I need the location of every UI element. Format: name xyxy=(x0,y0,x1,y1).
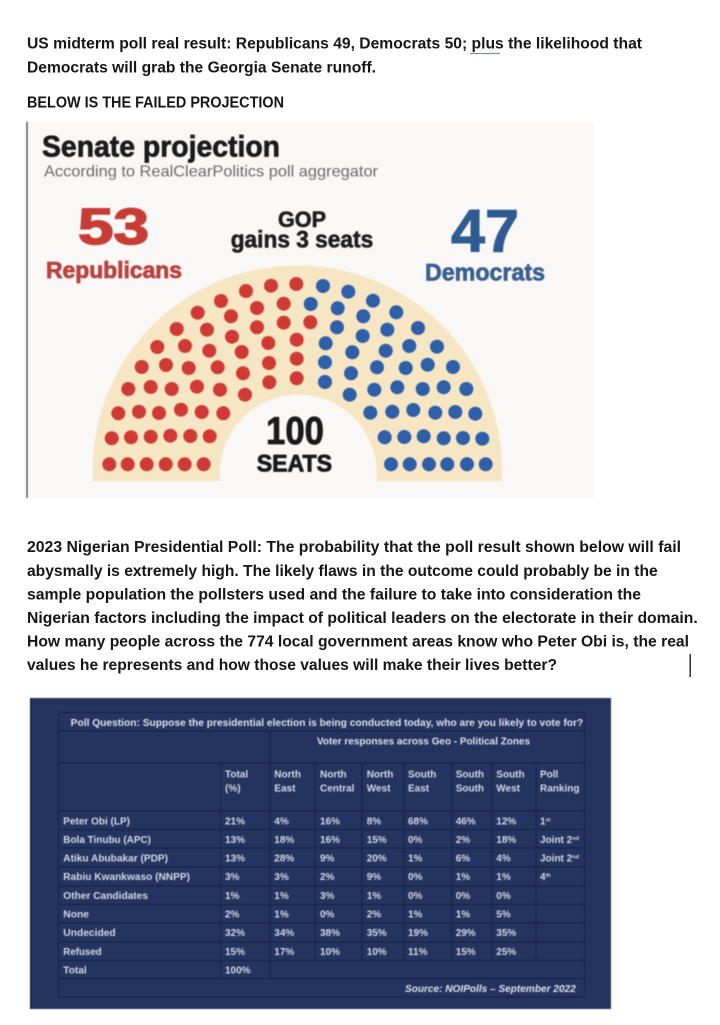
hemicycle arch xyxy=(93,265,502,481)
row: Bola Tinubu: nd xyxy=(572,836,579,842)
row: Bola Tinubu xyxy=(63,835,579,846)
row: Rabiu Kwankwaso xyxy=(63,872,551,883)
zones heading: Voter responses across Geo - Political Zones xyxy=(317,736,530,747)
row: Other Candidates: Other Candidates xyxy=(63,891,148,902)
row: Rabiu Kwankwaso: 4 xyxy=(540,872,546,883)
row: Rabiu Kwankwaso: 2% xyxy=(320,872,335,883)
total seats label: SEATS xyxy=(257,451,332,478)
row: Refused: 15% xyxy=(225,947,245,958)
row: Atiku Abubakar xyxy=(63,854,579,865)
row: Other Candidates: 0% xyxy=(408,891,423,902)
row: Bola Tinubu: 18% xyxy=(274,835,294,846)
row: Undecided: 35% xyxy=(367,928,387,939)
column headers: (%) xyxy=(225,784,241,795)
column headers: East xyxy=(408,784,430,795)
row: Atiku Abubakar: 6% xyxy=(456,854,470,865)
column headers: Central xyxy=(320,784,355,795)
row: Rabiu Kwankwaso: 3% xyxy=(225,872,240,883)
row: Refused: 25% xyxy=(496,947,516,958)
row: Bola Tinubu: 18% xyxy=(496,835,516,846)
subheading: failed projection: BELOW IS THE FAILED PROJECTION xyxy=(27,95,284,112)
row: None: 1% xyxy=(274,910,289,921)
table grid xyxy=(58,712,585,997)
column headers: South xyxy=(456,770,484,781)
panel: senate projection xyxy=(26,122,594,498)
column headers: North xyxy=(320,770,347,781)
democrat label: Democrats xyxy=(425,260,545,287)
intro text: US midterm result xyxy=(27,36,642,77)
source note: Source: NOIPolls – September 2022 xyxy=(405,984,576,995)
row: Peter Obi: 16% xyxy=(320,816,340,827)
row: None xyxy=(63,910,511,921)
column headers: North xyxy=(274,770,301,781)
GOP gains note: GOP xyxy=(278,207,326,232)
row: Undecided: 38% xyxy=(320,928,340,939)
row: Peter Obi: 4% xyxy=(274,816,289,827)
row: Total: Total xyxy=(63,966,87,976)
democrat count: 47 xyxy=(451,198,519,265)
row: Rabiu Kwankwaso: Rabiu Kwankwaso (NNPP) xyxy=(63,872,190,883)
row: Other Candidates: 0% xyxy=(496,891,511,902)
row: Peter Obi: 21% xyxy=(225,816,245,827)
row: Peter Obi: 1 xyxy=(540,816,546,827)
row: Other Candidates: 1% xyxy=(367,891,381,902)
column headers: South xyxy=(456,784,484,795)
red seats xyxy=(102,277,317,471)
column headers: South xyxy=(496,770,525,781)
row: Refused: 15% xyxy=(456,947,476,958)
row: Bola Tinubu: 13% xyxy=(225,835,245,846)
row: Other Candidates xyxy=(63,891,511,902)
row: Rabiu Kwankwaso: 0% xyxy=(408,872,423,883)
row: Rabiu Kwankwaso: 1% xyxy=(496,872,511,883)
row: Atiku Abubakar: 28% xyxy=(274,854,294,865)
intro text: US midterm result: US midterm poll real result: Republicans 49, Democrats 50; plus the likelihood that xyxy=(27,36,642,52)
row: Atiku Abubakar: Joint 2 xyxy=(540,854,572,865)
column headers xyxy=(225,770,579,795)
row: Refused xyxy=(63,947,516,958)
paragraph: Nigerian presidential poll: How many people across the 774 local government areas know who Peter Obi is, the real xyxy=(27,634,689,651)
total seats label: 100 xyxy=(266,410,324,453)
row: Other Candidates: 1% xyxy=(225,891,240,902)
row: Peter Obi: 12% xyxy=(496,816,516,827)
row: Atiku Abubakar: Atiku Abubakar (PDP) xyxy=(63,854,168,865)
row: Undecided: 32% xyxy=(225,928,245,939)
GOP gains note: gains 3 seats xyxy=(231,226,373,253)
row: Refused: 10% xyxy=(367,947,387,958)
paragraph: Nigerian presidential poll: 2023 Nigerian Presidential Poll: The probability that the poll result shown below will fail xyxy=(27,539,681,556)
column headers: South xyxy=(408,770,436,781)
paragraph: Nigerian presidential poll: Nigerian factors including the impact of political leaders on the electorate in their domain. xyxy=(27,610,698,627)
row: Undecided xyxy=(63,928,516,939)
row: Rabiu Kwankwaso: th xyxy=(546,873,551,879)
row: Rabiu Kwankwaso: 3% xyxy=(274,872,289,883)
column headers: Ranking xyxy=(540,784,579,795)
row: Bola Tinubu: Joint 2 xyxy=(540,835,572,846)
row: Total xyxy=(63,966,251,976)
row: Bola Tinubu: 0% xyxy=(408,835,423,846)
row: Refused: 11% xyxy=(408,947,428,958)
row: Refused: Refused xyxy=(63,947,102,958)
paragraph: Nigerian presidential poll xyxy=(27,539,698,674)
row: None: 2% xyxy=(225,910,240,921)
poll question: Poll Question: Suppose the presidential election is being conducted today, who are you likely to vote for? xyxy=(71,718,583,729)
row: Bola Tinubu: Bola Tinubu (APC) xyxy=(63,835,151,846)
row: Peter Obi: st xyxy=(546,817,551,823)
row: Other Candidates: 1% xyxy=(274,891,289,902)
row: Undecided: 35% xyxy=(496,928,516,939)
republican label: Republicans xyxy=(46,257,182,283)
row: Other Candidates: 3% xyxy=(320,891,335,902)
row: None: 5% xyxy=(496,910,511,921)
row: Undecided: 19% xyxy=(408,928,428,939)
row: Total: 100% xyxy=(225,966,251,976)
senate subtitle: According to RealClearPolitics poll aggregator xyxy=(44,164,379,181)
row: Rabiu Kwankwaso: 1% xyxy=(456,872,470,883)
GOP gains note xyxy=(231,207,373,253)
paragraph: Nigerian presidential poll: values he represents and how those values will make their lives better? xyxy=(27,657,557,674)
row: None: 2% xyxy=(367,910,381,921)
column headers: North xyxy=(367,770,393,781)
republican count: 53 xyxy=(78,198,149,255)
row: Undecided: Undecided xyxy=(63,928,116,939)
row: Other Candidates: 0% xyxy=(456,891,470,902)
blue seats xyxy=(304,279,493,471)
row: None: 1% xyxy=(408,910,423,921)
row: Bola Tinubu: 2% xyxy=(456,835,470,846)
row: Rabiu Kwankwaso: 9% xyxy=(367,872,381,883)
row: Bola Tinubu: 15% xyxy=(367,835,387,846)
row: Undecided: 34% xyxy=(274,928,294,939)
senate title: Senate projection xyxy=(42,131,280,164)
paragraph: Nigerian presidential poll: abysmally is extremely high. The likely flaws in the outcome could probably be in the xyxy=(27,563,658,580)
row: Peter Obi: Peter Obi (LP) xyxy=(63,816,130,827)
column headers: Total xyxy=(225,770,248,781)
text cursor mark xyxy=(690,654,691,677)
row: Atiku Abubakar: nd xyxy=(572,855,579,861)
row: Peter Obi xyxy=(63,816,551,827)
row: Bola Tinubu: 16% xyxy=(320,835,340,846)
paragraph: Nigerian presidential poll: sample population the pollsters used and the failure to take into consideration the xyxy=(27,586,641,604)
row: Atiku Abubakar: 20% xyxy=(367,854,387,865)
column headers: West xyxy=(367,784,391,795)
column headers: East xyxy=(274,784,296,795)
row: Atiku Abubakar: 4% xyxy=(496,854,511,865)
row: Peter Obi: 46% xyxy=(456,816,476,827)
intro text: US midterm result: Democrats will grab the Georgia Senate runoff. xyxy=(27,60,376,77)
row: Refused: 10% xyxy=(320,947,340,958)
row: Peter Obi: 68% xyxy=(408,816,428,827)
row: Atiku Abubakar: 9% xyxy=(320,854,335,865)
row: None: 1% xyxy=(456,910,470,921)
column headers: Poll xyxy=(540,770,559,781)
row: Undecided: 29% xyxy=(456,928,476,939)
row: None: None xyxy=(63,910,89,921)
panel: poll table xyxy=(30,698,611,1009)
total seats label xyxy=(257,410,332,478)
row: Atiku Abubakar: 13% xyxy=(225,854,245,865)
row: Refused: 17% xyxy=(274,947,294,958)
row: Atiku Abubakar: 1% xyxy=(408,854,423,865)
row: Peter Obi: 8% xyxy=(367,816,381,827)
row: None: 0% xyxy=(320,910,335,921)
column headers: West xyxy=(496,784,521,795)
